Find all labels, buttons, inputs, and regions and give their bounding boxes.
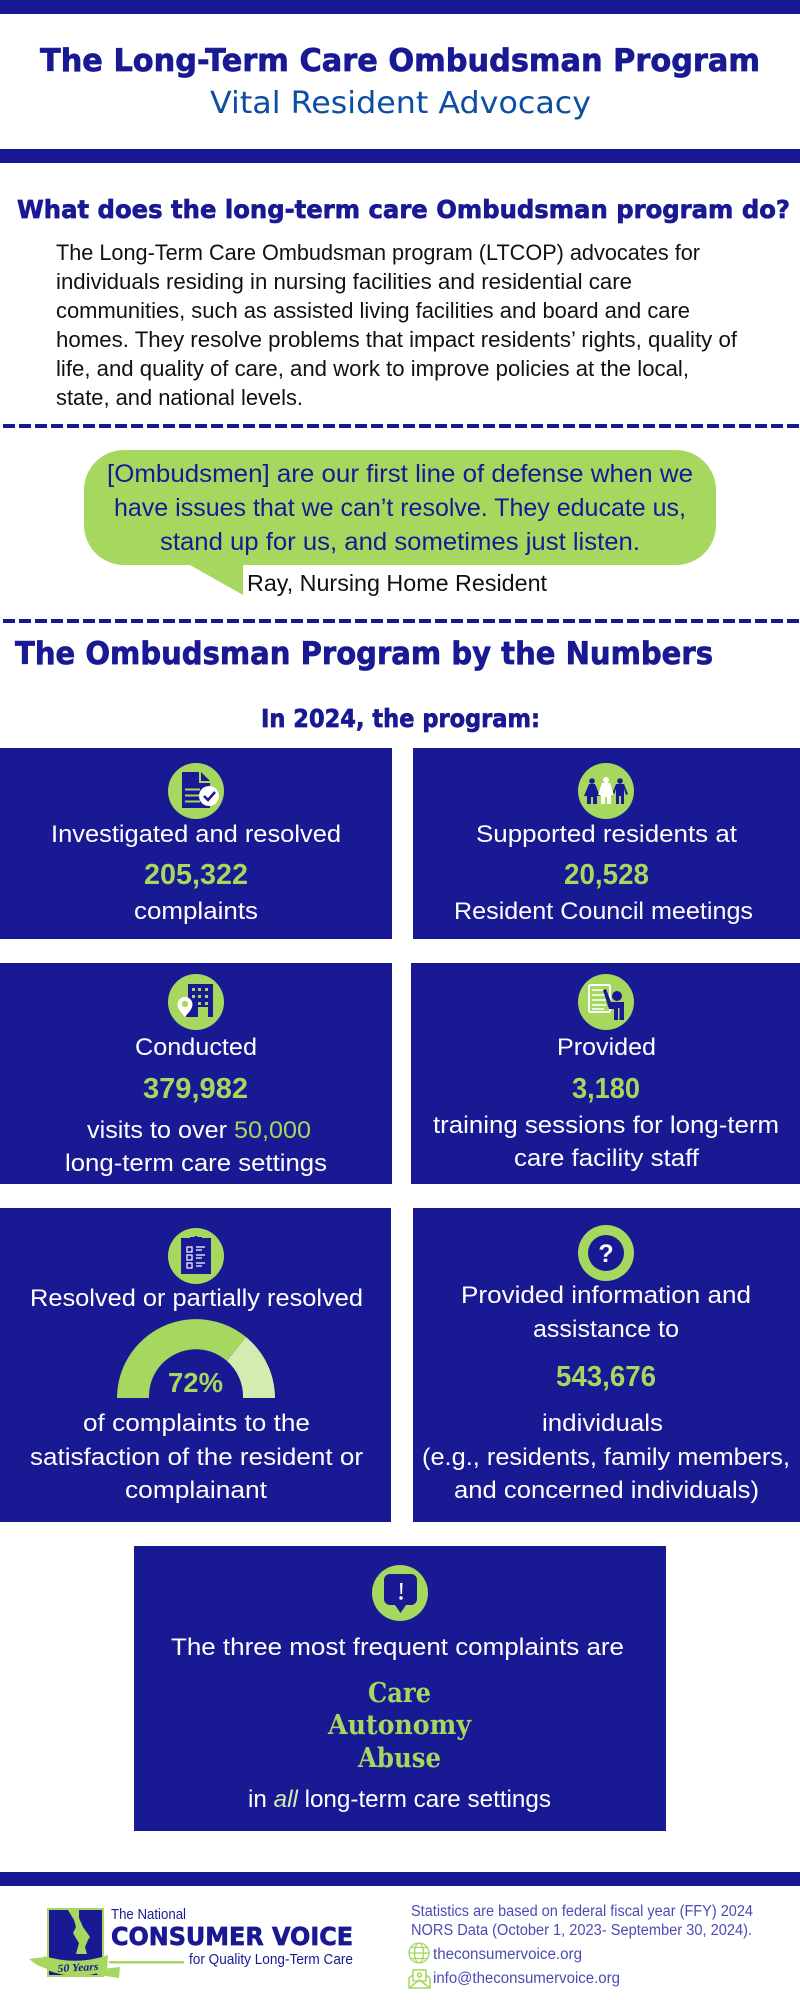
- panel: training sessions: training sessions for long-term: [433, 1112, 779, 1139]
- text block: program description: homes. They resolve problems that impact residents’ rights, quality of: [56, 327, 738, 352]
- panel: visits conducted: visits to over 50,000: [87, 1117, 311, 1144]
- quote text: have issues that we can’t resolve. They educate us,: [114, 494, 686, 522]
- logo: National Consumer Voice: [29, 1906, 353, 1978]
- website link: theconsumervoice.org: [433, 1946, 582, 1963]
- text block: program description: The Long-Term Care Ombudsman program (LTCOP) advocates for: [56, 240, 700, 265]
- logo: National Consumer Voice: The National: [111, 1906, 186, 1923]
- panel: complaints resolved: complainant: [125, 1477, 267, 1504]
- panel: resident council support: [413, 748, 800, 939]
- panel: visits conducted: Conducted: [135, 1034, 257, 1061]
- text block: data source note: NORS Data (October 1, 2023- September 30, 2024).: [411, 1922, 752, 1939]
- text block: program description: [56, 240, 738, 410]
- panel: complaints investigated: [0, 748, 392, 939]
- panel: information and assistance: Provided information and: [461, 1282, 751, 1309]
- logo emblem: 50 Years: [57, 1961, 99, 1975]
- logo: National Consumer Voice: CONSUMER VOICE: [111, 1922, 353, 1951]
- quote text: stand up for us, and sometimes just listen.: [160, 528, 640, 556]
- header lower bar: [0, 149, 800, 163]
- panel: complaints resolved: [0, 1208, 391, 1522]
- panel: information and assistance: assistance to: [533, 1316, 679, 1343]
- icon: three people: [578, 763, 634, 819]
- list: top complaints: Care: [368, 1678, 431, 1709]
- subheading: in 2024: In 2024, the program:: [261, 704, 540, 733]
- panel: most frequent complaints: in all long-term care settings: [248, 1786, 551, 1813]
- panel: most frequent complaints: [134, 1546, 666, 1831]
- icon: email envelope: [409, 1970, 430, 1988]
- number: visits: 379,982: [143, 1073, 248, 1105]
- number: complaints: 205,322: [144, 859, 248, 891]
- icon: clipboard checklist: [168, 1228, 224, 1284]
- speech bubble: [84, 450, 716, 595]
- quote text: [Ombudsmen] are our first line of defense when we: [107, 460, 693, 488]
- number: training sessions: 3,180: [572, 1073, 640, 1105]
- icon: question mark: [578, 1225, 634, 1281]
- icon: trainer at board: [578, 974, 634, 1030]
- list: top complaints: Abuse: [357, 1743, 441, 1774]
- text block: data source note: Statistics are based on federal fiscal year (FFY) 2024: [411, 1903, 753, 1920]
- icon: alert speech bubble: [372, 1565, 428, 1621]
- panel: information and assistance: individuals: [542, 1410, 663, 1437]
- heading: what the program does: What does the long-term care Ombudsman program do?: [17, 195, 790, 224]
- icon: document with check: [168, 763, 224, 819]
- text block: program description: communities, such as assisted living facilities and board and care: [56, 298, 690, 323]
- logo: National Consumer Voice: for Quality Long-Term Care: [189, 1951, 353, 1968]
- text block: data source note: [411, 1903, 753, 1939]
- icon: question mark: ?: [598, 1240, 614, 1268]
- panel: information and assistance: and concerned individuals): [454, 1477, 759, 1504]
- panel: complaints investigated: complaints: [134, 898, 258, 925]
- gauge chart: 72 percent: 72%: [168, 1367, 223, 1398]
- number: meetings: 20,528: [564, 859, 649, 891]
- panel: complaints resolved: of complaints to the: [83, 1410, 310, 1437]
- panel: complaints resolved: satisfaction of the resident or: [30, 1444, 363, 1471]
- callout: resident quote: [84, 450, 716, 596]
- panel: training sessions: [411, 963, 800, 1184]
- panel: complaints resolved: Resolved or partially resolved: [30, 1285, 363, 1312]
- panel: information and assistance: [413, 1208, 800, 1522]
- title: The Long-Term Care Ombudsman Program: [40, 43, 760, 79]
- panel: visits conducted: long-term care settings: [65, 1150, 327, 1177]
- icon: globe: [409, 1943, 429, 1963]
- footer bar: [0, 1872, 800, 1886]
- text block: program description: life, and quality of care, and work to improve policies at the local,: [56, 356, 689, 381]
- text block: program description: state, and national levels.: [56, 385, 303, 410]
- title: Vital Resident Advocacy: [210, 86, 591, 121]
- email link: info@theconsumervoice.org: [433, 1970, 620, 1987]
- panel: information and assistance: (e.g., residents, family members,: [422, 1444, 790, 1471]
- top banner bar: [0, 0, 800, 14]
- panel: resident council support: Resident Council meetings: [454, 898, 753, 925]
- number: individuals: 543,676: [556, 1361, 656, 1393]
- panel: training sessions: care facility staff: [514, 1145, 699, 1172]
- panel: visits conducted: [0, 963, 392, 1184]
- quote text: [107, 460, 693, 556]
- icon: building with location pin: [168, 974, 224, 1030]
- gauge chart: 72 percent: [117, 1319, 275, 1398]
- logo emblem: [29, 1909, 120, 1978]
- panel: resident council support: Supported residents at: [476, 821, 737, 848]
- list: top complaints: Autonomy: [327, 1710, 472, 1741]
- list: top complaints: [327, 1678, 472, 1774]
- panel: complaints investigated: Investigated and resolved: [51, 821, 341, 848]
- quote attribution: Ray, Nursing Home Resident: [247, 570, 548, 596]
- title: [40, 43, 760, 121]
- panel: most frequent complaints: The three most frequent complaints are: [171, 1634, 624, 1661]
- panel: training sessions: Provided: [557, 1034, 656, 1061]
- text block: program description: individuals residing in nursing facilities and residential care: [56, 269, 632, 294]
- heading: by the numbers: The Ombudsman Program by the Numbers: [15, 636, 713, 672]
